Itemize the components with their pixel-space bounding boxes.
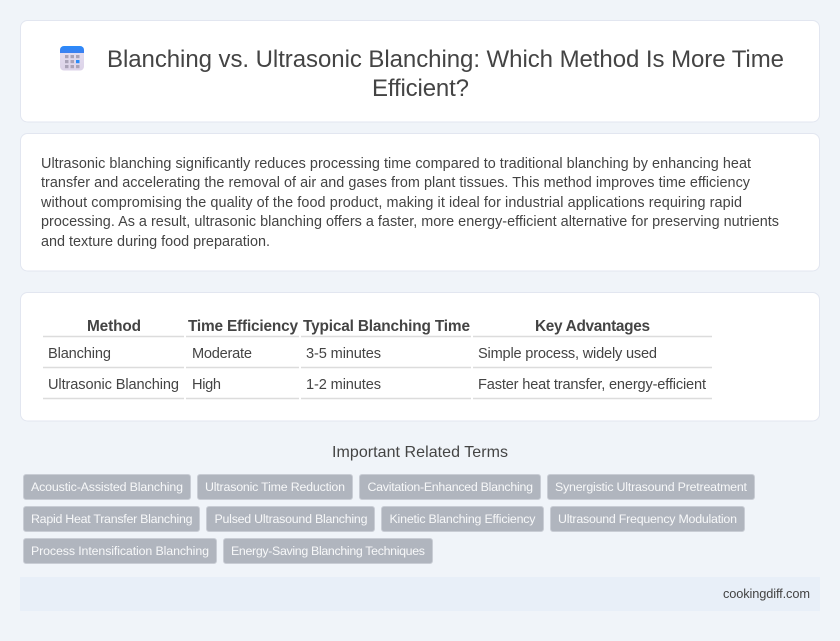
tag: Rapid Heat Transfer Blanching — [31, 512, 193, 526]
tag — [360, 474, 540, 500]
panel: comparison table — [20, 292, 820, 421]
panel: header — [20, 20, 820, 122]
tag — [548, 474, 754, 500]
text block: description: and texture during food preparation. — [41, 234, 270, 250]
table header — [87, 318, 650, 335]
tag — [198, 474, 352, 500]
table row: blanching — [48, 346, 657, 362]
tag: Ultrasound Frequency Modulation — [558, 512, 737, 526]
table row: ultrasonic blanching: High — [192, 377, 221, 393]
text block: description: Ultrasonic blanching significantly reduces processing time compared to traditional blanching by enhancing heat — [41, 156, 751, 172]
text block: description — [40, 156, 779, 250]
table row: blanching: 3-5 minutes — [306, 346, 381, 362]
tag: Acoustic-Assisted Blanching — [31, 480, 183, 494]
table header: Key Advantages — [535, 318, 650, 335]
text block: description: transfer and accelerating the removal of air and gases from plant tissues. This method improves time efficiency — [41, 175, 751, 191]
tag: Process Intensification Blanching — [31, 544, 209, 558]
tag: Synergistic Ultrasound Pretreatment — [555, 480, 748, 494]
table header: Method — [87, 318, 141, 335]
table row: ultrasonic blanching: 1-2 minutes — [306, 377, 381, 393]
icon: calendar — [60, 46, 84, 70]
table header: Typical Blanching Time — [303, 318, 470, 335]
title: Efficient? — [372, 75, 469, 102]
tag: Kinetic Blanching Efficiency — [390, 512, 536, 526]
table row: ultrasonic blanching: Faster heat transfer, energy-efficient — [478, 377, 706, 393]
text block: description: processing. As a result, ultrasonic blanching offers a faster, more energy-efficient alternative for preserving nutrients — [41, 214, 779, 230]
tag: Pulsed Ultrasound Blanching — [214, 512, 368, 526]
tags: related terms — [24, 474, 754, 564]
tag: Cavitation-Enhanced Blanching — [368, 480, 533, 494]
table row: ultrasonic blanching: Ultrasonic Blanching — [48, 377, 179, 393]
text block: description: without compromising the quality of the food product, making it ideal for industrial applications requiring rapid — [40, 195, 742, 211]
tag — [224, 538, 432, 564]
panel: description — [20, 134, 820, 271]
table row: blanching: Simple process, widely used — [478, 346, 657, 362]
tag — [550, 506, 744, 532]
title — [107, 46, 784, 102]
tag — [206, 506, 374, 532]
table row: blanching: Blanching — [48, 346, 111, 362]
title: Blanching vs. Ultrasonic Blanching: Which Method Is More Time — [107, 46, 784, 73]
table header: Time Efficiency — [188, 318, 298, 335]
tag — [24, 474, 190, 500]
tag — [24, 506, 200, 532]
footer: cookingdiff.com — [723, 586, 810, 601]
tag: Ultrasonic Time Reduction — [205, 480, 345, 494]
heading: related terms: Important Related Terms — [332, 444, 508, 461]
tag — [24, 538, 216, 564]
footer — [20, 577, 820, 611]
table row: ultrasonic blanching — [48, 377, 706, 393]
tag — [382, 506, 544, 532]
tag: Energy-Saving Blanching Techniques — [231, 544, 425, 558]
table row: blanching: Moderate — [192, 346, 252, 362]
